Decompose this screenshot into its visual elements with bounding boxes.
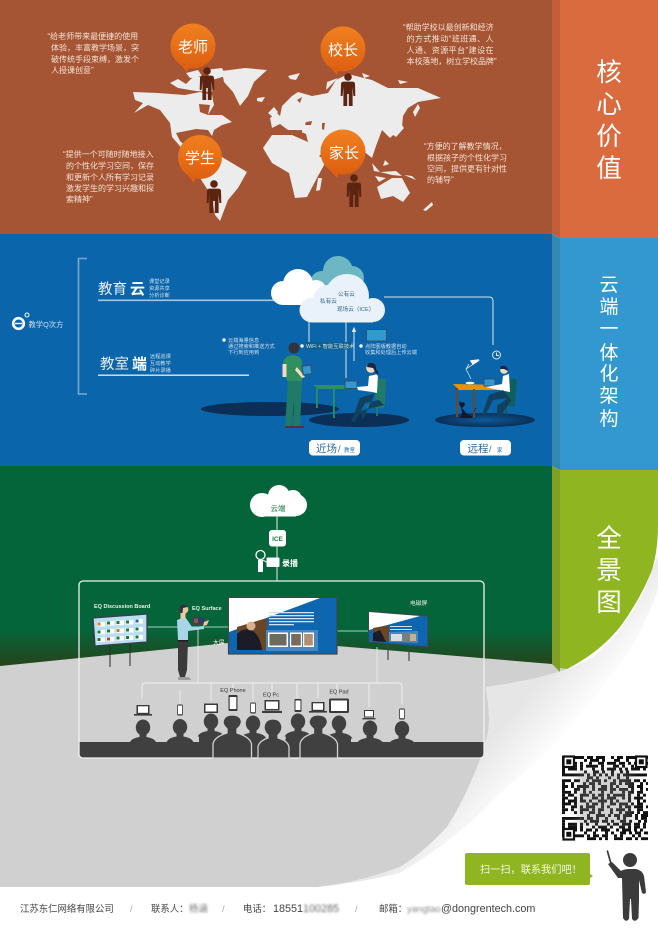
text: 学生 quote <box>63 149 154 204</box>
heading: 教室端: 碎片录播 <box>150 366 172 374</box>
footer contact bar <box>20 903 535 915</box>
figure: teacher with tablet <box>177 604 209 680</box>
side label: 云端一体化架构: 化 <box>599 363 619 385</box>
heading: 教育云: 云 <box>130 281 145 298</box>
text: 学生 quote: 激发学生的学习兴趣和探 <box>66 183 154 193</box>
heading: 教育云 <box>98 277 274 301</box>
cloud: 云端: 云端 <box>270 503 286 513</box>
display: EQ Discussion Board: EQ Discussion Board <box>94 604 150 610</box>
bubble: 老师 <box>170 24 216 72</box>
text: 家长 quote <box>424 141 507 184</box>
person: 学生 <box>207 180 221 213</box>
text: 家长 quote: “方便的了解教学情况， <box>424 141 507 151</box>
connector lines <box>309 297 500 378</box>
side label: 核心价值: 价 <box>596 123 622 151</box>
heading: 教室端: 教室 <box>100 356 129 373</box>
heading: 教育云: 分析诊断 <box>149 291 170 299</box>
label: 远程 / 家 <box>460 440 511 456</box>
icon: monitor and note <box>359 330 417 356</box>
figure: table and seated woman <box>313 363 386 422</box>
side label: 核心价值 <box>552 0 658 238</box>
text: 校长 quote: 的方式推动“班班通、人 <box>406 34 494 44</box>
person: 家长 <box>347 174 361 207</box>
footer contact bar: / <box>222 903 225 914</box>
devices row <box>134 695 405 720</box>
box: ICE: ICE <box>272 536 284 543</box>
callout: 扫一扫 <box>465 853 593 885</box>
label: 远程 / 家: 远程 <box>468 443 489 455</box>
cloud diagram: 私有云 <box>320 297 337 305</box>
logo: 教学Q次方 <box>13 313 63 329</box>
text: 家长 quote: 根据孩子的个性化学习 <box>427 152 507 162</box>
text: 家长 quote: 的辅导” <box>427 174 454 184</box>
shadows on floor <box>201 402 535 427</box>
side label: 云端一体化架构 <box>552 234 658 470</box>
heading: 教室端 <box>98 352 249 376</box>
text: 老师 quote <box>48 31 139 75</box>
page curl <box>317 556 658 887</box>
footer contact bar: @dongrentech.com <box>441 903 535 915</box>
room frame <box>79 581 484 758</box>
text: 老师 quote: 人授课创意” <box>51 65 94 75</box>
footer contact bar: 100285 <box>303 903 339 915</box>
QR code <box>561 754 649 842</box>
footer contact bar: 杨涵 <box>189 903 208 914</box>
panel: 核心价值 brown section <box>0 0 658 238</box>
connector lines to screens <box>147 627 377 683</box>
label: 电磁屏: 电磁屏 <box>410 599 428 607</box>
label: EQ Surface: EQ Surface <box>192 606 222 612</box>
heading: 教育云: 课堂记录 <box>149 277 170 285</box>
figure: pointing person <box>606 850 646 921</box>
side label: 全景图: 图 <box>596 589 622 617</box>
bubble: 家长 <box>320 130 366 178</box>
side label: 云端一体化架构: 云 <box>599 275 619 296</box>
side label: 云端一体化架构: 体 <box>599 342 619 364</box>
cloud diagram: 现场云（ICE） <box>337 305 374 313</box>
label: 近场 / 教室: 教室 <box>344 446 356 454</box>
audience silhouettes <box>130 714 416 758</box>
note: WiFi: WiFi + 智能互联技术 <box>306 342 355 350</box>
cloud diagram: 公有云 <box>338 290 355 298</box>
icon: camera 录播 <box>256 550 298 572</box>
floor <box>0 643 575 887</box>
label: 远程 / 家: / <box>489 444 492 454</box>
labels: EQ devices: EQ Pad <box>329 690 349 696</box>
footer contact bar: 邮箱： <box>379 903 407 914</box>
side label: 云端一体化架构: 架 <box>599 385 619 407</box>
side label: 核心价值: 值 <box>596 155 622 183</box>
side label: 云端一体化架构: 构 <box>599 408 619 430</box>
cloud: 云端 <box>250 485 307 517</box>
label: 近场 / 教室 <box>309 440 360 456</box>
text: 校长 quote: 本校落地，树立学校品牌” <box>406 56 497 66</box>
footer contact bar: / <box>355 903 358 914</box>
heading: 教室端: 端 <box>132 356 147 373</box>
labels: EQ devices: EQ Pc <box>263 692 279 698</box>
side label: 核心价值: 心 <box>596 91 622 119</box>
note: 云端海量信息: 下行到应用到 <box>228 348 259 356</box>
side label: 云端一体化架构: 端 <box>599 296 619 318</box>
text: 校长 quote: “帮助学校以最创新和经济 <box>403 22 494 32</box>
panel: 云端一体化架构 blue section <box>0 234 658 470</box>
bracket <box>78 258 87 394</box>
connector: cloud to room <box>276 516 278 581</box>
figure: home desk with lamp, man and cat <box>453 360 517 418</box>
display: big screen <box>228 598 337 654</box>
text: 学生 quote: “提供一个可随时随地接入 <box>63 149 154 159</box>
text: 老师 quote: 体验，丰富教学场景，突 <box>51 42 139 52</box>
display: EQ Discussion Board <box>93 604 150 667</box>
text: 学生 quote: 和更新个人所有学习记录 <box>66 172 154 182</box>
labels: EQ devices <box>220 688 349 698</box>
footer contact bar: 联系人： <box>151 903 189 914</box>
side label: 全景图: 景 <box>596 557 622 585</box>
text: 校长 quote: 人通、资源平台”建设在 <box>406 45 494 55</box>
side label: 核心价值: 核 <box>596 59 622 87</box>
side label: 全景图 <box>552 466 658 672</box>
callout: 扫一扫: 扫一扫，联系我们吧！ <box>480 863 582 876</box>
note: 云端海量信息: 通过搜索和推送方式 <box>228 342 276 350</box>
person: 老师 <box>200 67 214 100</box>
label: 远程 / 家: 家 <box>497 446 503 454</box>
bubble: 校长 <box>320 26 366 75</box>
text: 学生 quote: 索精神” <box>66 194 93 204</box>
display: small screen on stand <box>368 612 428 661</box>
note: 云端海量信息: 云端海量信息 <box>228 336 259 344</box>
footer contact bar: 18551 <box>273 903 303 915</box>
icon: camera 录播: 录播 <box>282 558 298 568</box>
side label: 云端一体化架构: 一 <box>599 319 619 340</box>
device network <box>142 683 402 707</box>
bubble: 老师: 老师 <box>178 39 208 56</box>
footer contact bar: 电话： <box>243 903 271 914</box>
label: 近场 / 教室: / <box>338 444 341 454</box>
box: ICE <box>269 530 286 546</box>
bubble: 家长: 家长 <box>329 145 359 162</box>
icon: monitor and note: 点阵图版教据自动 <box>365 342 407 350</box>
bubble: 学生 <box>178 135 222 183</box>
note: WiFi <box>300 342 355 350</box>
labels: EQ devices: EQ Phone <box>220 688 246 694</box>
bubble: 校长: 校长 <box>328 42 358 59</box>
panel: 全景图 green section <box>0 466 658 887</box>
label: 近场 / 教室: 近场 <box>316 442 337 455</box>
logo: 教学Q次方: 教学Q次方 <box>28 320 63 329</box>
footer contact bar: yangtao <box>407 904 441 915</box>
person: 校长 <box>341 73 355 106</box>
text: 学生 quote: 的个性化学习空间，保存 <box>66 160 154 170</box>
heading: 教室端: 远程巡课 <box>150 352 172 360</box>
world map <box>133 68 441 221</box>
icon: monitor and note: 收集和处理后上传云端 <box>365 348 417 356</box>
footer contact bar: / <box>130 903 133 914</box>
note: 云端海量信息 <box>222 336 276 356</box>
text: 校长 quote <box>403 22 497 66</box>
footer contact bar: 江苏东仁网络有限公司 <box>20 903 114 914</box>
label: 大屏: 大屏 <box>213 638 225 646</box>
heading: 教室端: 互动教学 <box>150 359 171 367</box>
heading: 教育云: 教育 <box>98 281 127 298</box>
figure: standing man <box>282 342 313 428</box>
side label: 全景图: 全 <box>596 525 622 553</box>
heading: 教育云: 资源共享 <box>149 284 170 292</box>
text: 家长 quote: 空间，提供更有针对性 <box>427 164 507 174</box>
text: 老师 quote: 破传统手段束缚，激发个 <box>51 54 139 64</box>
bubble: 学生: 学生 <box>185 150 215 167</box>
text: 老师 quote: “给老师带来最便捷的使用 <box>48 31 138 41</box>
cloud diagram <box>271 256 385 322</box>
